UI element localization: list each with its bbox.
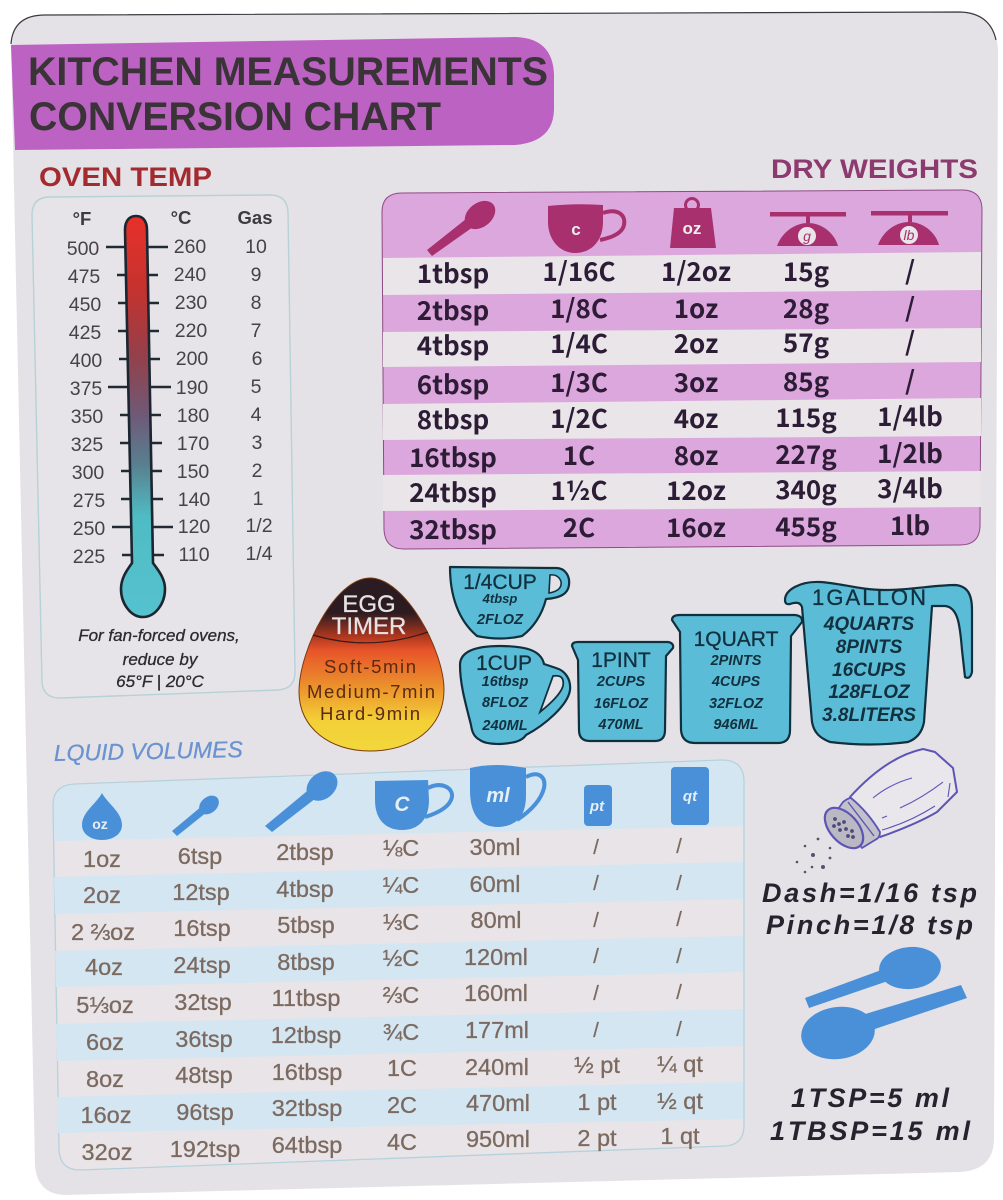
measure: one pint: 2CUPS: [596, 674, 645, 690]
dry weights values: 12oz: [666, 471, 726, 508]
dry weights values: 1/8C: [550, 289, 608, 326]
celsius scale: 180: [177, 405, 209, 427]
liquid values: 120ml: [464, 944, 528, 970]
celsius scale: 110: [178, 544, 210, 566]
liquid values: 2 pt: [577, 1125, 617, 1151]
liquid values: 60ml: [470, 871, 520, 897]
celsius scale: 220: [175, 320, 207, 342]
dry weights values: 3/4lb: [877, 469, 943, 506]
dry weights values: 32tbsp: [409, 510, 497, 547]
measure: one gallon: [785, 582, 972, 744]
liquid values: /: [676, 836, 682, 858]
dry weights values: 227g: [775, 435, 837, 472]
liquid values: 12tbsp: [271, 1022, 341, 1048]
measure: one cup: 8FLOZ: [482, 695, 529, 711]
liquid values: 32oz: [82, 1139, 132, 1165]
celsius scale: 150: [177, 461, 209, 483]
icon: quart can: [671, 767, 709, 825]
dry weights values: 115g: [775, 398, 837, 435]
egg timer: [299, 578, 444, 751]
gas marks: [245, 236, 273, 565]
liquid values: ¾C: [383, 1019, 419, 1045]
liquid values: 177ml: [465, 1017, 529, 1043]
dry weights values: 1/16C: [542, 252, 616, 289]
panel: dry weights table: [382, 190, 982, 549]
icon: oz drop: oz: [92, 816, 108, 832]
dry weights values: 15g: [783, 252, 830, 289]
icon: tablespoon: [265, 765, 343, 832]
celsius scale: 140: [178, 489, 210, 511]
gas marks: 7: [251, 320, 261, 342]
dry weights values: 1C: [563, 436, 595, 473]
liquid values: /: [676, 1019, 682, 1041]
celsius scale: 240: [174, 264, 206, 286]
gas marks: 10: [245, 236, 267, 258]
fan oven note: 65°F | 20°C: [116, 672, 205, 691]
liquid values: /: [593, 1020, 599, 1042]
icon: tablespoon: [427, 195, 501, 256]
measure: one quart: 2PINTS: [710, 653, 762, 669]
measure: one gallon: 3.8LITERS: [822, 705, 916, 726]
column headers: °C: [171, 207, 191, 228]
text: dash and pinch: Pinch=1/8 tsp: [766, 910, 973, 940]
card top edge: [11, 12, 996, 44]
dry weights values: 1/2lb: [877, 434, 943, 471]
icon: pint can: [584, 785, 612, 826]
egg timer title: TIMER: [332, 613, 406, 640]
gas marks: 8: [251, 292, 261, 314]
liquid values: 192tsp: [170, 1136, 240, 1162]
dry weights values: 2oz: [674, 324, 718, 361]
celsius scale: 200: [176, 348, 208, 370]
liquid values: 12tsp: [172, 879, 230, 905]
dry weights values: /: [905, 361, 915, 398]
text: teaspoon and tablespoon volumes: [770, 1083, 970, 1146]
measure: one pint: 470ML: [597, 717, 644, 733]
icon: cup: [375, 780, 452, 830]
icon: gram scale: [770, 212, 846, 246]
liquid values: /: [676, 909, 682, 931]
dry weights values: 1/2oz: [661, 252, 731, 289]
text: teaspoon and tablespoon volumes: 1TBSP=15 ml: [770, 1116, 970, 1146]
icon: cup: [548, 204, 624, 253]
liquid values: 1C: [387, 1055, 417, 1081]
measure: quarter cup: [450, 567, 569, 638]
liquid values: 4oz: [85, 954, 123, 980]
liquid values: 6tsp: [178, 843, 222, 869]
liquid values: 48tsp: [175, 1062, 233, 1088]
liquid values: 32tbsp: [272, 1095, 342, 1121]
celsius scale: [174, 236, 210, 566]
dry weights values: 1lb: [890, 506, 930, 543]
icon: oz drop: [82, 793, 122, 840]
measure: quarter cup: 2FLOZ: [476, 612, 524, 628]
liquid values: ½C: [383, 945, 419, 971]
dry weights values: 85g: [783, 362, 830, 399]
icon: quart can: qt: [683, 788, 698, 805]
fan oven note: For fan-forced ovens,: [78, 626, 240, 645]
liquid values: ½ pt: [574, 1052, 620, 1078]
dry weights values: 16tbsp: [409, 438, 497, 475]
celsius scale: 120: [178, 516, 210, 538]
liquid values: 80ml: [471, 907, 521, 933]
text: dash and pinch: Dash=1/16 tsp: [762, 878, 977, 908]
egg timer times: Soft-5min: [324, 656, 416, 677]
icon: ml mug: [470, 765, 544, 827]
dry weights values: 1oz: [674, 289, 718, 326]
liquid values: /: [676, 873, 682, 895]
dry weights values: 28g: [783, 289, 830, 326]
egg timer times: [307, 656, 435, 724]
liquid values: /: [593, 910, 599, 932]
liquid values: 470ml: [466, 1090, 530, 1116]
liquid values: 1 pt: [577, 1089, 617, 1115]
dry weights values: 57g: [783, 323, 830, 360]
thermometer: [106, 216, 173, 617]
dry weights values: 1/3C: [550, 363, 608, 400]
title text: KITCHEN MEASUREMENTS: [28, 50, 548, 94]
title banner: [11, 37, 554, 150]
dry weights values: [409, 251, 943, 547]
liquid values: ⅓C: [383, 909, 419, 935]
liquid values: ½ qt: [657, 1088, 703, 1114]
heading: oven temp: OVEN TEMP: [39, 162, 212, 192]
icon: ounce weight: oz: [683, 219, 701, 238]
egg timer title: EGG: [342, 591, 396, 618]
liquid values: 2oz: [83, 882, 121, 908]
dry weights values: 2C: [563, 508, 595, 545]
icon: cup: C: [394, 793, 410, 816]
dry weights values: 1/2C: [550, 399, 608, 436]
liquid values: 32tsp: [174, 989, 232, 1015]
measure: one pint: 16FLOZ: [594, 696, 649, 712]
dry weights values: /: [905, 288, 915, 325]
fan oven note: [78, 626, 240, 691]
gas marks: 1/4: [245, 543, 273, 565]
liquid values: 2C: [387, 1092, 417, 1118]
dry weights values: 340g: [775, 470, 837, 507]
liquid values: ⅔C: [383, 982, 419, 1008]
icon: ounce weight: [670, 198, 716, 248]
dry weights values: 3oz: [674, 363, 718, 400]
dry weights values: 4tbsp: [417, 326, 489, 363]
liquid values: /: [593, 946, 599, 968]
measure: one quart: 4CUPS: [711, 674, 760, 690]
icon: pint can: pt: [589, 798, 605, 815]
panel: oven temperature: [32, 195, 295, 698]
measure: quarter cup: 4tbsp: [482, 591, 517, 606]
fahrenheit scale: 475: [68, 266, 100, 288]
liquid values: 6oz: [86, 1029, 124, 1055]
liquid values: 4C: [387, 1129, 417, 1155]
celsius scale: 170: [177, 433, 209, 455]
liquid values: /: [593, 873, 599, 895]
measure: one gallon: 4QUARTS: [823, 614, 915, 635]
liquid values: /: [593, 837, 599, 859]
fahrenheit scale: 450: [69, 294, 101, 316]
liquid values: 2 ⅔oz: [71, 919, 135, 945]
dry weights values: 4oz: [674, 399, 718, 436]
gas marks: 1/2: [245, 515, 273, 537]
fahrenheit scale: 375: [70, 378, 102, 400]
fahrenheit scale: 500: [67, 238, 99, 260]
egg timer times: Hard-9min: [320, 703, 420, 724]
gas marks: 3: [252, 432, 262, 454]
dry weights values: /: [905, 322, 915, 359]
egg timer title: [332, 591, 406, 640]
heading: dry weights: DRY WEIGHTS: [771, 154, 978, 184]
liquid values: 16oz: [81, 1102, 131, 1128]
column headers: Gas: [238, 207, 272, 228]
fahrenheit scale: [67, 238, 105, 568]
liquid values: 4tbsp: [276, 876, 334, 902]
liquid values: 30ml: [470, 834, 520, 860]
dry weights values: 8oz: [674, 436, 718, 473]
liquid values: ¼ qt: [657, 1051, 703, 1077]
liquid values: 1oz: [83, 846, 121, 872]
liquid values: /: [593, 983, 599, 1005]
gas marks: 5: [251, 376, 262, 398]
fahrenheit scale: 400: [70, 350, 102, 372]
icon: gram scale: g: [803, 228, 811, 244]
liquid values: 8oz: [86, 1066, 124, 1092]
dry weights values: 1/4C: [550, 324, 608, 361]
fahrenheit scale: 300: [72, 462, 104, 484]
measure: one quart: 946ML: [713, 717, 759, 733]
icon: pound scale: lb: [904, 227, 915, 243]
liquid values: 36tsp: [175, 1026, 233, 1052]
liquid values: 16tsp: [173, 915, 231, 941]
white rows: [383, 252, 981, 511]
dry weights values: 2tbsp: [417, 291, 489, 328]
dry weights values: 8tbsp: [417, 400, 489, 437]
title text: [28, 50, 548, 139]
gas marks: 6: [252, 348, 262, 370]
measure: one gallon: 1GALLON: [812, 585, 926, 610]
liquid values: 5⅓oz: [76, 992, 134, 1018]
celsius scale: 260: [174, 236, 206, 258]
fan oven note: reduce by: [123, 650, 199, 669]
liquid values: 240ml: [465, 1054, 529, 1080]
measure: one cup: [460, 646, 570, 744]
liquid values: /: [676, 946, 682, 968]
column headers: °F: [73, 208, 91, 229]
liquid values: 950ml: [466, 1126, 530, 1152]
measure: one quart: 32FLOZ: [709, 696, 764, 712]
liquid values: 1 qt: [660, 1123, 700, 1149]
liquid values: 8tbsp: [277, 949, 335, 975]
dry weights values: 455g: [775, 507, 837, 544]
liquid values: 64tbsp: [272, 1132, 342, 1158]
blue rows: [54, 761, 743, 1133]
measure: quarter cup: 1/4CUP: [463, 571, 537, 594]
liquid values: /: [676, 982, 682, 1004]
liquid values: 24tsp: [173, 952, 231, 978]
dry weights values: 1½C: [550, 471, 608, 508]
measure: one gallon: 128FLOZ: [828, 682, 911, 703]
liquid values: ⅛C: [383, 835, 419, 861]
measure: one cup: 240ML: [481, 718, 528, 734]
icon: ml mug: ml: [486, 785, 510, 807]
gas marks: 1: [253, 488, 263, 510]
icon: teaspoon: [172, 792, 223, 836]
fahrenheit scale: 225: [73, 546, 105, 568]
liquid values: 11tbsp: [272, 985, 340, 1011]
panel: liquid volumes table: [53, 760, 744, 1170]
liquid values: 2tbsp: [276, 839, 334, 865]
gas marks: 4: [251, 404, 262, 426]
egg timer times: Medium-7min: [307, 681, 435, 702]
liquid values: 160ml: [464, 980, 528, 1006]
measure: one pint: 1PINT: [591, 649, 651, 672]
dry weights values: 24tbsp: [409, 473, 497, 510]
fahrenheit scale: 250: [73, 518, 105, 540]
fahrenheit scale: 425: [69, 322, 101, 344]
column headers: [73, 207, 272, 229]
measure: one cup: 1CUP: [476, 652, 532, 675]
dry weights values: 16oz: [666, 508, 726, 545]
gas marks: 2: [252, 460, 262, 482]
title text: CONVERSION CHART: [29, 95, 441, 139]
measure: one pint: [572, 642, 673, 741]
liquid values: ¼C: [383, 872, 419, 898]
dry weights values: 1/4lb: [877, 397, 943, 434]
icon: salt shaker: [796, 749, 957, 873]
fahrenheit scale: 275: [73, 490, 105, 512]
measure: one quart: [672, 615, 802, 743]
measure: one gallon: 8PINTS: [836, 637, 903, 658]
text: dash and pinch: [762, 878, 977, 940]
heading: liquid volumes: LQUID VOLUMES: [54, 736, 244, 766]
dry weights values: /: [905, 251, 915, 288]
dry weights values: 6tbsp: [417, 365, 489, 402]
liquid values: 5tbsp: [277, 912, 335, 938]
icon: cup: c: [571, 220, 581, 239]
icon: pound scale: [871, 211, 948, 245]
text: teaspoon and tablespoon volumes: 1TSP=5 ml: [791, 1083, 949, 1113]
fahrenheit scale: 350: [71, 406, 103, 428]
liquid values: [71, 834, 703, 1165]
dry weights values: 1tbsp: [417, 254, 489, 291]
gas marks: 9: [251, 264, 261, 286]
measure: one cup: 16tbsp: [482, 674, 529, 690]
icon: measuring spoons: [798, 944, 967, 1064]
celsius scale: 190: [176, 377, 208, 399]
liquid values: 96tsp: [176, 1099, 234, 1125]
liquid values: 16tbsp: [272, 1059, 342, 1085]
fahrenheit scale: 325: [71, 434, 103, 456]
celsius scale: 230: [175, 292, 207, 314]
measure: one quart: 1QUART: [694, 628, 779, 651]
measure: one gallon: 16CUPS: [832, 660, 906, 681]
